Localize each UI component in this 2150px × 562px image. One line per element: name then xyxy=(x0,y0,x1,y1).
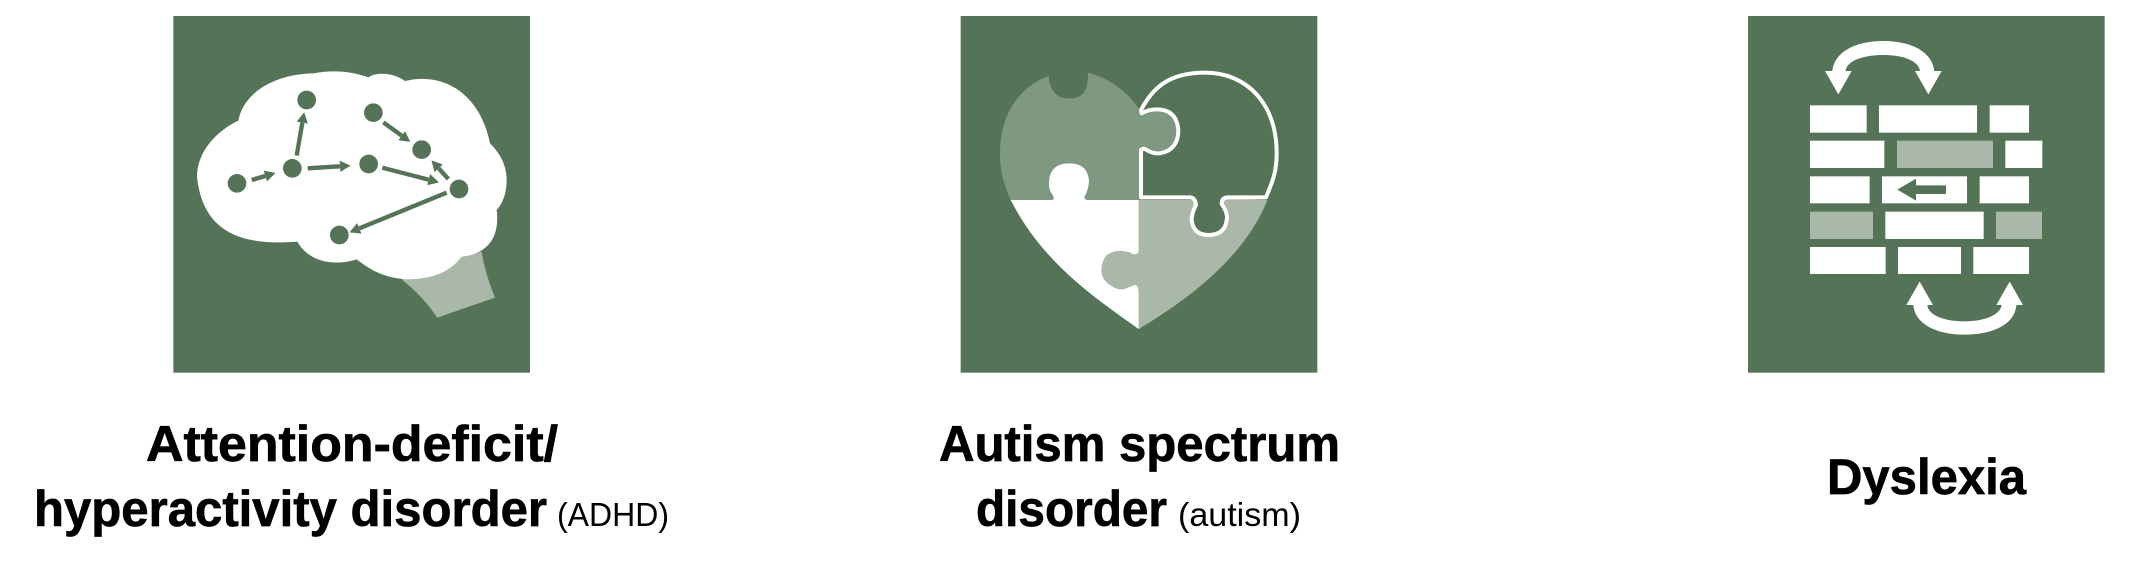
icon: brain stem xyxy=(402,252,495,318)
label: ADHD xyxy=(34,416,669,537)
puzzle piece: bottom right xyxy=(1101,199,1267,329)
panel: dyslexia icon xyxy=(1748,16,2105,373)
label: autism: disorder xyxy=(976,481,1167,537)
label: autism xyxy=(939,416,1340,537)
panel background xyxy=(961,16,1317,373)
panel background xyxy=(1748,16,2105,373)
label: ADHD: Attention-deficit/ xyxy=(146,416,558,472)
panel: autism icon xyxy=(961,16,1317,373)
panel: ADHD icon xyxy=(173,16,530,373)
puzzle piece: top right outline xyxy=(1141,73,1277,235)
icon: brain xyxy=(197,71,507,279)
icon: top swap arrow xyxy=(1825,41,1942,94)
puzzle piece: top left xyxy=(1000,73,1180,200)
label: autism: Autism spectrum xyxy=(939,416,1340,472)
icon: left arrow in brick xyxy=(1897,179,1946,201)
panel background xyxy=(173,16,530,373)
label: ADHD: (ADHD) xyxy=(557,496,669,533)
label: autism: (autism) xyxy=(1178,496,1301,533)
icon: word bricks xyxy=(1810,105,2042,274)
network: nodes and arrows xyxy=(228,91,468,244)
icon: bottom swap arrow xyxy=(1906,282,2023,335)
label: dyslexia: Dyslexia xyxy=(1827,449,2027,505)
label: ADHD: hyperactivity disorder xyxy=(34,481,547,537)
puzzle piece: bottom left xyxy=(1011,163,1139,329)
